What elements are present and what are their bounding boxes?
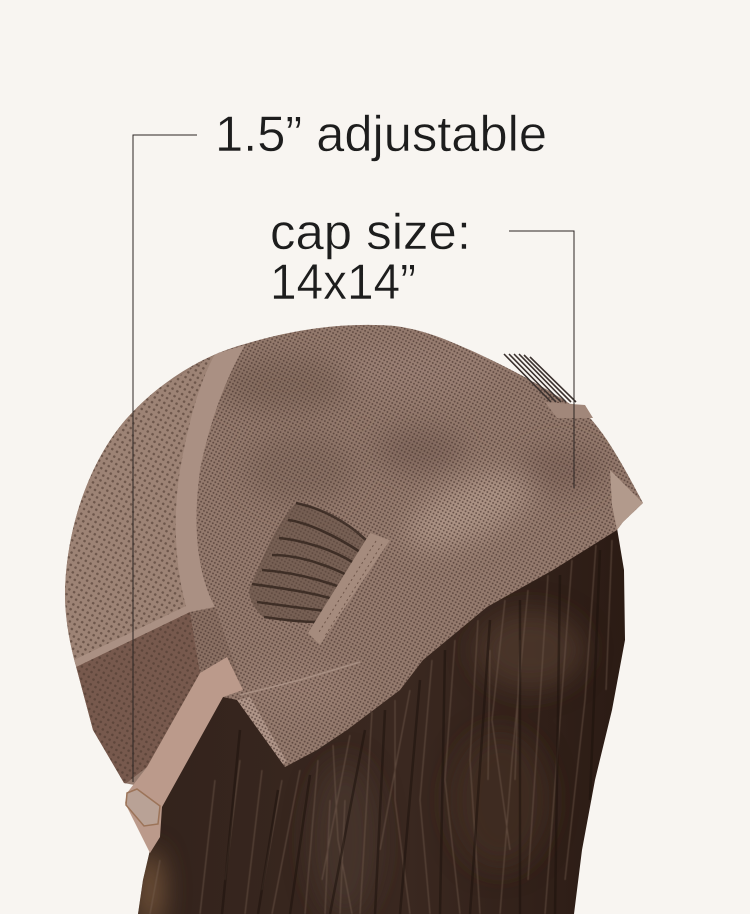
ear tab <box>237 697 287 767</box>
label: cap size: 14x14” <box>270 254 416 310</box>
right lace edge <box>610 470 643 530</box>
cap shell <box>65 325 643 790</box>
fine mesh <box>190 320 650 770</box>
leader line: cap size <box>509 231 574 488</box>
lace stitching line <box>240 662 360 695</box>
leader line: adjustable <box>133 135 197 782</box>
ear mesh <box>190 607 240 681</box>
cap tonal patches <box>60 320 650 785</box>
hair strands light <box>150 540 612 914</box>
hair <box>130 500 630 914</box>
left panel <box>60 352 220 680</box>
hair strands dark <box>222 550 600 914</box>
nape panel <box>74 612 200 785</box>
hair tint patches <box>138 610 585 914</box>
small comb <box>504 354 593 418</box>
strap buckle <box>126 789 160 826</box>
label: cap size: cap size: <box>270 204 471 260</box>
wig cap <box>60 320 650 853</box>
label: cap size <box>270 204 471 310</box>
adjustable strap <box>125 657 243 853</box>
label: adjustable: 1.5” adjustable <box>215 106 547 162</box>
seam band <box>74 345 245 670</box>
large comb <box>249 503 390 645</box>
